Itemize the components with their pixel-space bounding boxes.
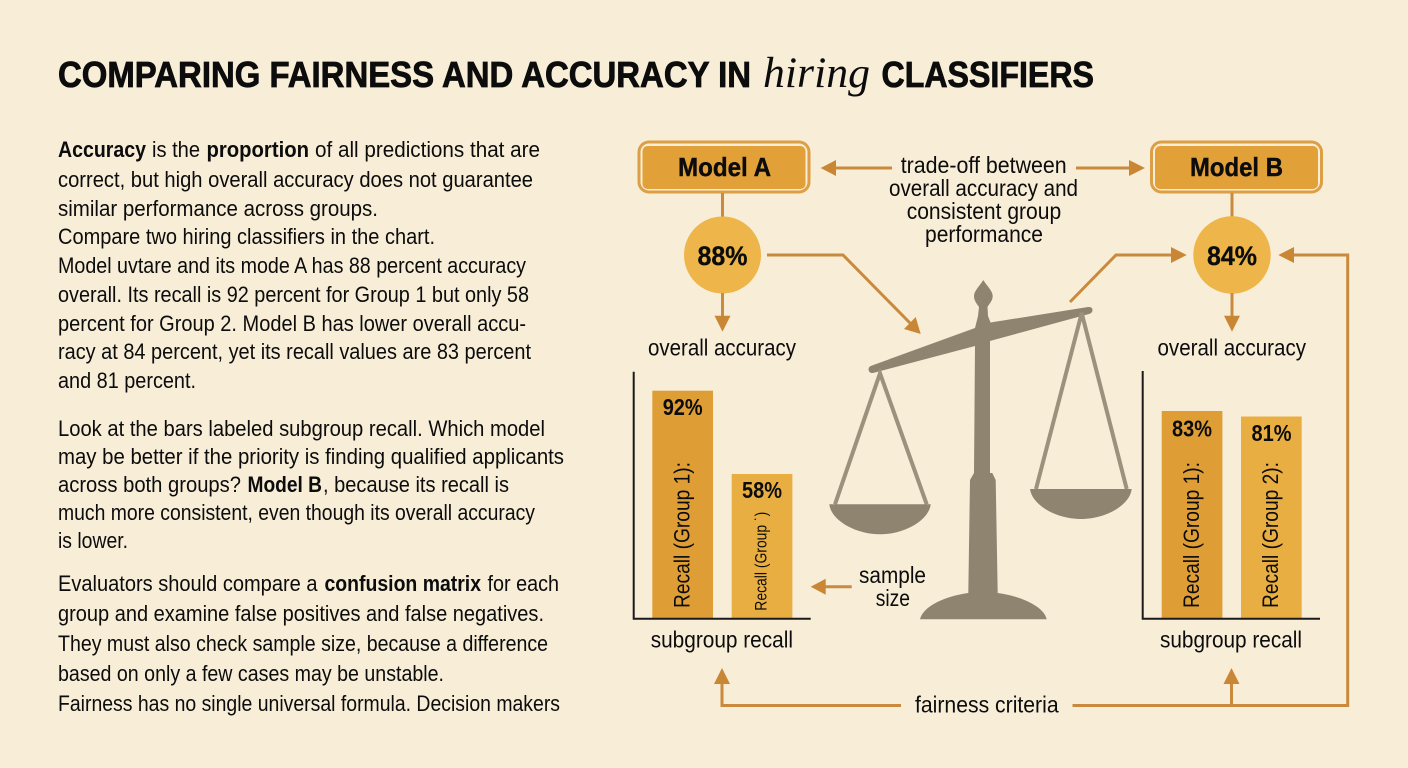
paragraph: subgroup recall question: much more consistent, even though its overall accuracy bbox=[58, 500, 536, 525]
panel: explanatory text bbox=[58, 137, 564, 716]
arrow: down to overall accuracy bbox=[1224, 293, 1240, 332]
bar: Group 1 at 83%: Recall (Group 1): bbox=[1179, 462, 1204, 608]
bar: Group 1 at 83%: 83% bbox=[1172, 416, 1212, 442]
paragraph: evaluators and fairness bbox=[58, 571, 560, 716]
connector: Model B to accuracy bbox=[1230, 193, 1234, 218]
title bbox=[58, 50, 1094, 97]
paragraph: accuracy and model comparison: overall. Its recall is 92 percent for Group 1 but only 58 bbox=[58, 282, 529, 307]
arrow: trade-off to Model B bbox=[1076, 160, 1145, 176]
paragraph: accuracy and model comparison: proportion bbox=[206, 137, 309, 162]
callout: trade-off bbox=[889, 152, 1078, 247]
callout: trade-off: trade-off between bbox=[901, 152, 1067, 178]
callout: trade-off: overall accuracy and bbox=[889, 175, 1078, 201]
callout: trade-off: performance bbox=[925, 221, 1043, 247]
paragraph: accuracy and model comparison: racy at 84 percent, yet its recall values are 83 percent bbox=[58, 339, 532, 364]
title: CLASSIFIERS bbox=[882, 54, 1094, 95]
paragraph: accuracy and model comparison: Model uvtare and its mode A has 88 percent accuracy bbox=[58, 253, 527, 278]
paragraph: evaluators and fairness: They must also check sample size, because a difference bbox=[58, 631, 548, 656]
accuracy circle: 84%: 84% bbox=[1207, 241, 1257, 271]
arrow: scale to 84% bbox=[1070, 247, 1187, 302]
Model A label box: Model A bbox=[678, 152, 771, 182]
bar: Group 2 at 58%: 58% bbox=[742, 477, 782, 503]
callout: sample size: size bbox=[876, 585, 910, 611]
paragraph: subgroup recall question: Look at the bars labeled subgroup recall. Which model bbox=[58, 416, 545, 441]
label: fairness criteria: fairness criteria bbox=[915, 692, 1059, 718]
paragraph: evaluators and fairness: confusion matrix bbox=[324, 571, 481, 596]
paragraph: evaluators and fairness: based on only a few cases may be unstable. bbox=[58, 661, 444, 686]
Model B label box bbox=[1152, 142, 1322, 192]
arrow: sample size to bars bbox=[811, 579, 852, 595]
paragraph: subgroup recall question: across both groups? bbox=[58, 472, 241, 497]
paragraph: evaluators and fairness: Evaluators should compare a bbox=[58, 571, 318, 596]
label: subgroup recall: subgroup recall bbox=[1160, 626, 1302, 652]
paragraph: accuracy and model comparison bbox=[58, 137, 540, 393]
paragraph: accuracy and model comparison: Compare two hiring classifiers in the chart. bbox=[58, 224, 435, 249]
icon: balance scale bbox=[829, 280, 1132, 619]
arrow: fairness criteria to Model B recall and 84% bbox=[1072, 247, 1348, 706]
accuracy circle: 88%: 88% bbox=[698, 241, 748, 271]
callout: trade-off: consistent group bbox=[907, 198, 1061, 224]
title: COMPARING FAIRNESS AND ACCURACY IN bbox=[58, 54, 751, 95]
paragraph: evaluators and fairness: group and examine false positives and false negatives. bbox=[58, 601, 544, 626]
arrow: 88% to scale bbox=[767, 255, 921, 334]
callout: sample size bbox=[859, 562, 926, 611]
callout: sample size: sample bbox=[859, 562, 926, 588]
paragraph: accuracy and model comparison: percent for Group 2. Model B has lower overall accu- bbox=[58, 311, 526, 336]
paragraph: accuracy and model comparison: is the bbox=[152, 137, 200, 162]
paragraph: evaluators and fairness: for each bbox=[488, 571, 559, 596]
bar: Group 2 at 58%: Recall (Group ˙) bbox=[752, 512, 771, 611]
paragraph: accuracy and model comparison: similar performance across groups. bbox=[58, 196, 378, 221]
paragraph: subgroup recall question: is lower. bbox=[58, 528, 128, 553]
paragraph: accuracy and model comparison: correct, but high overall accuracy does not guarantee bbox=[58, 167, 533, 192]
bar chart: Model B subgroup recall bbox=[1143, 371, 1320, 619]
paragraph: accuracy and model comparison: and 81 percent. bbox=[58, 368, 196, 393]
panel: Model B bbox=[1070, 142, 1322, 652]
label: subgroup recall: subgroup recall bbox=[651, 626, 793, 652]
bar: Group 2 at 81%: 81% bbox=[1252, 420, 1292, 446]
label: overall accuracy: overall accuracy bbox=[648, 334, 796, 360]
label: overall accuracy: overall accuracy bbox=[1158, 334, 1306, 360]
bar chart: Model A subgroup recall bbox=[634, 372, 811, 619]
bar: Group 2 at 81%: Recall (Group 2): bbox=[1258, 462, 1283, 608]
accuracy circle: 84% bbox=[1193, 216, 1271, 294]
connector: Model A to accuracy bbox=[721, 193, 724, 218]
paragraph: accuracy and model comparison: of all predictions that are bbox=[315, 137, 540, 162]
paragraph: subgroup recall question: may be better if the priority is finding qualified applicants bbox=[58, 444, 564, 469]
bar: Group 2 at 81% bbox=[1241, 416, 1302, 618]
paragraph: subgroup recall question bbox=[58, 416, 564, 553]
bar: Group 1 at 83% bbox=[1162, 411, 1222, 618]
arrow: fairness criteria to Model A recall bbox=[714, 668, 901, 706]
bar: Group 1 at 92% bbox=[652, 391, 713, 618]
arrow: trade-off to Model A bbox=[821, 160, 892, 176]
bar: Group 2 at 58% bbox=[732, 474, 792, 618]
panel: Model A bbox=[634, 142, 921, 652]
title: hiring bbox=[763, 50, 870, 97]
bar: Group 1 at 92%: Recall (Group 1): bbox=[670, 462, 694, 608]
paragraph: accuracy and model comparison: Accuracy bbox=[58, 137, 146, 162]
Model A label box bbox=[639, 142, 809, 192]
paragraph: subgroup recall question: Model B bbox=[248, 472, 322, 497]
paragraph: subgroup recall question: , because its recall is bbox=[323, 472, 509, 497]
Model B label box: Model B bbox=[1190, 152, 1283, 182]
arrow: down to overall accuracy bbox=[714, 293, 730, 332]
bar: Group 1 at 92%: 92% bbox=[663, 394, 703, 420]
accuracy circle: 88% bbox=[684, 216, 761, 294]
paragraph: evaluators and fairness: Fairness has no single universal formula. Decision makers bbox=[58, 691, 560, 716]
